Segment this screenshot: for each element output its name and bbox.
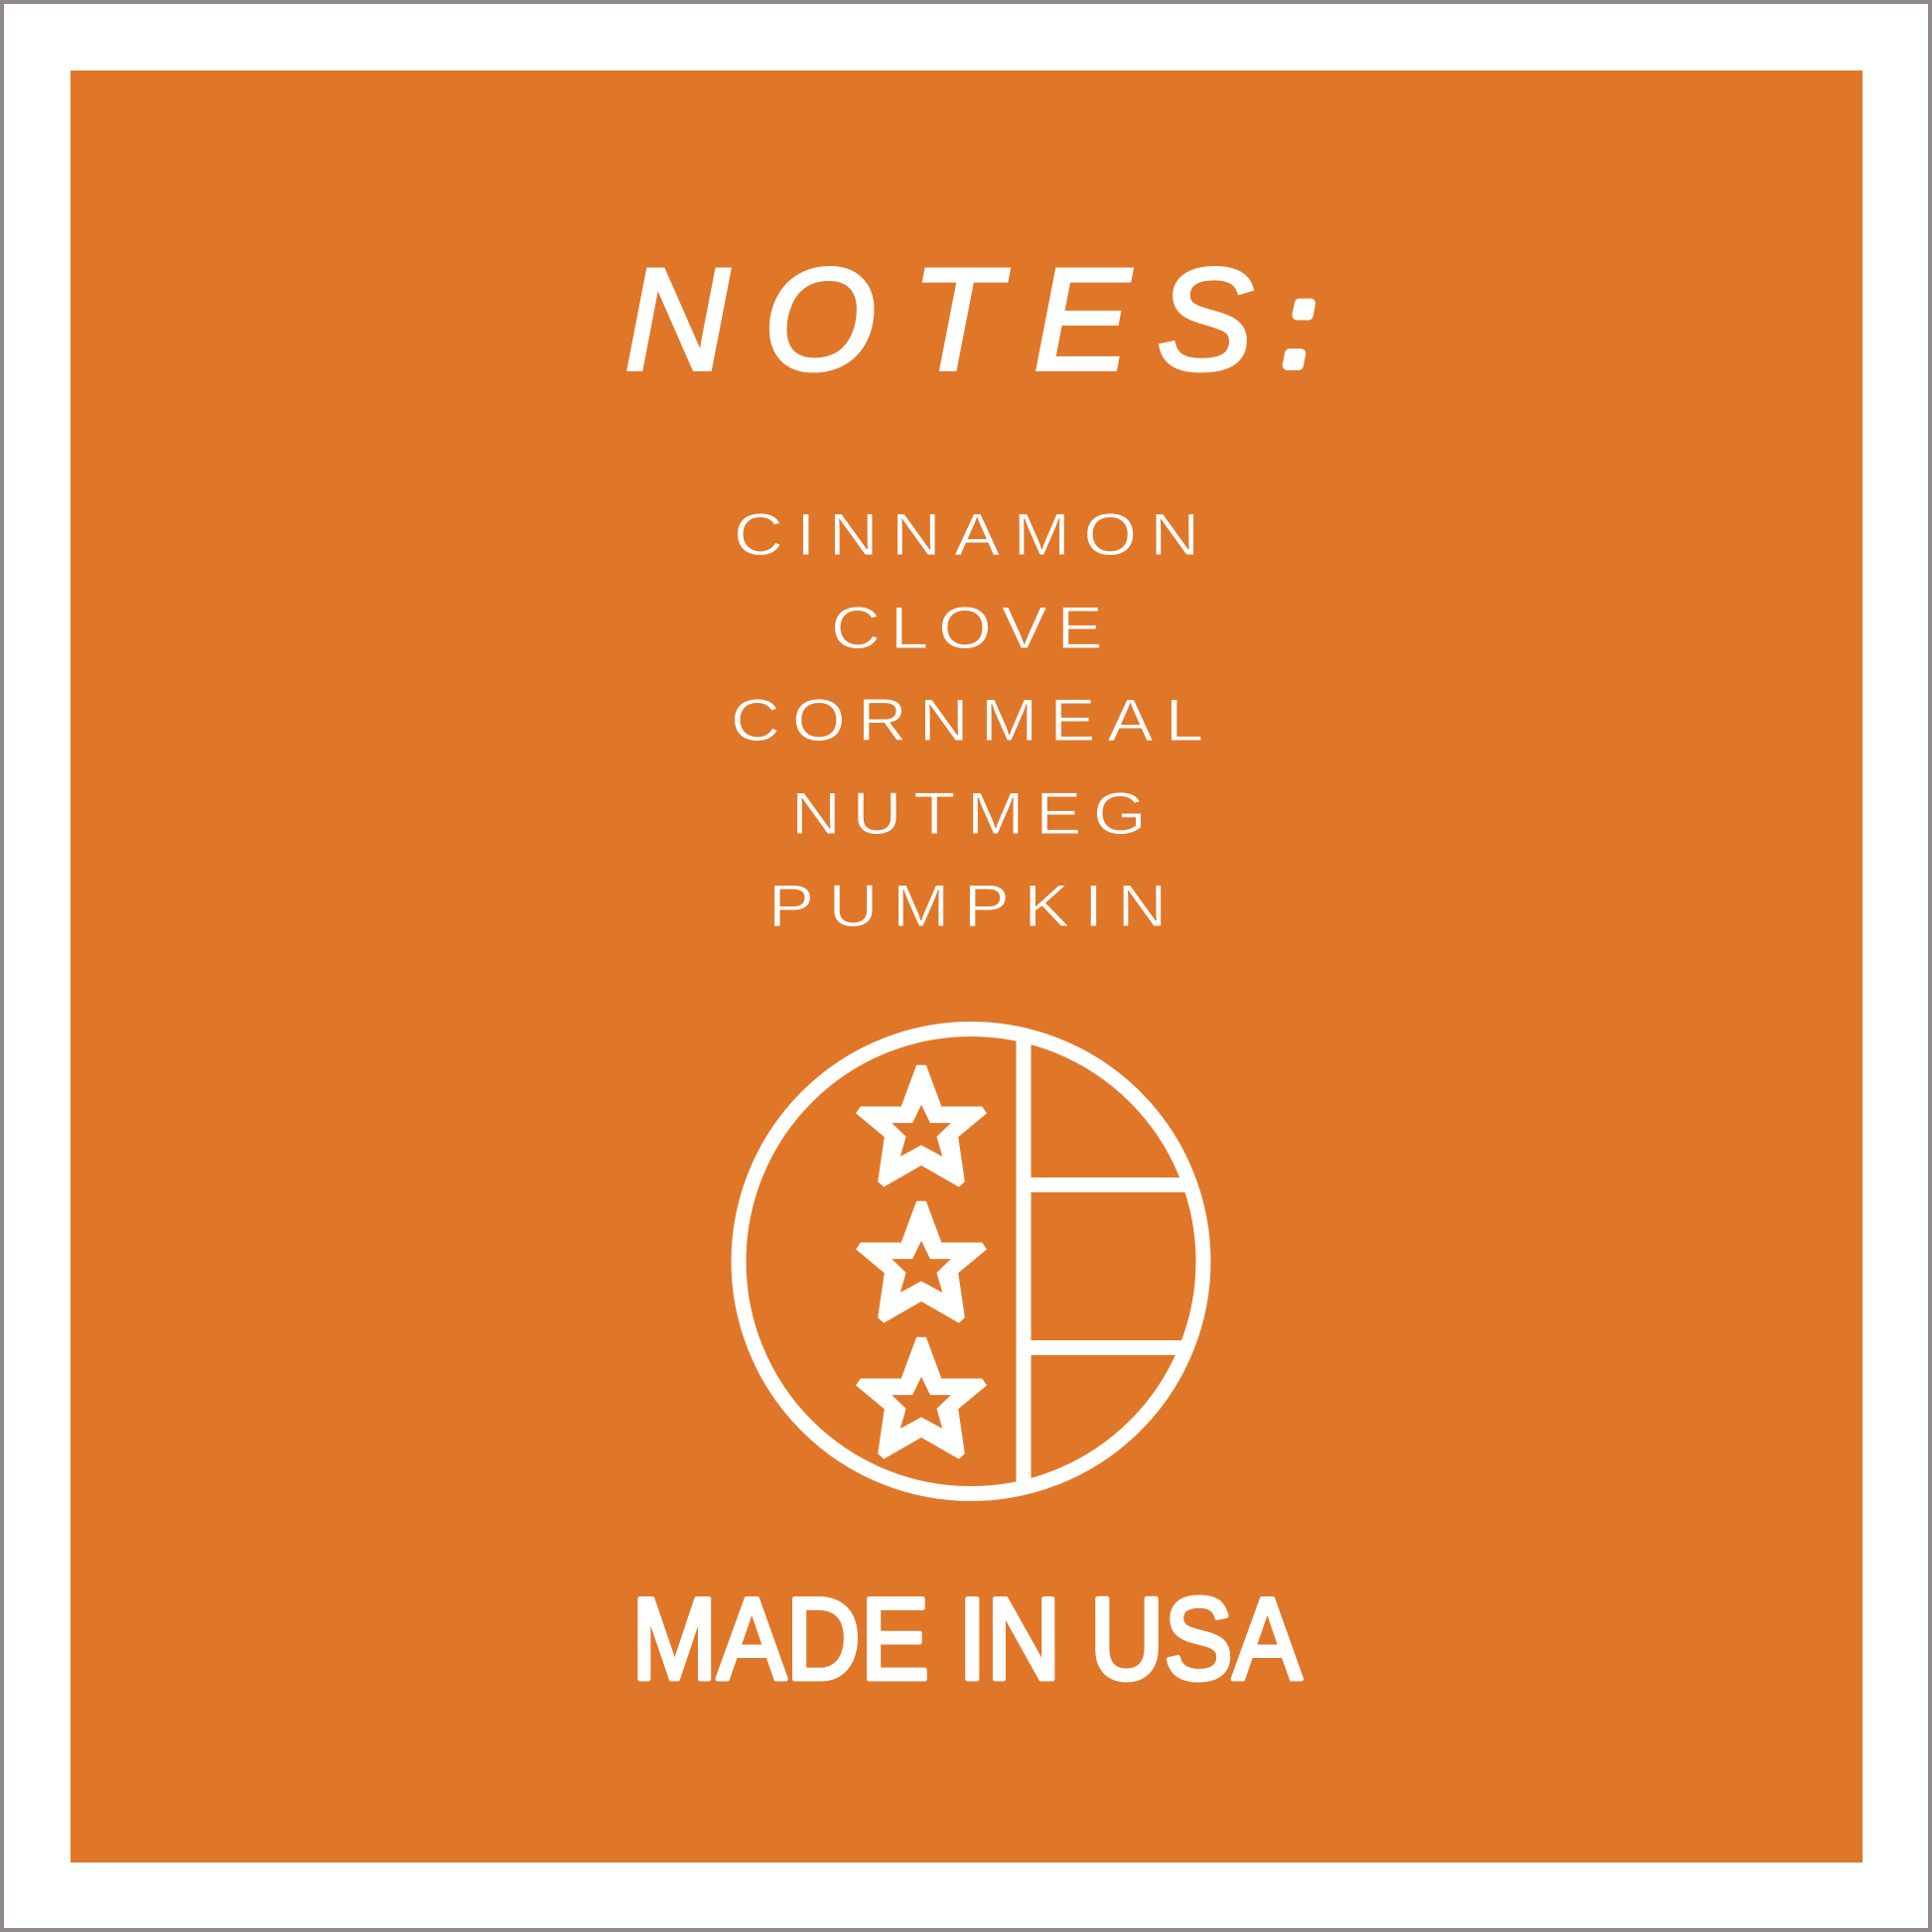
note: cinnamon: CINNAMON — [734, 500, 1199, 568]
note: clove: CLOVE — [831, 594, 1103, 661]
heading: notes: : — [1283, 260, 1315, 391]
note: nutmeg: NUTMEG — [791, 779, 1147, 847]
star 3 — [857, 1337, 986, 1458]
star 2 — [857, 1201, 986, 1322]
heading: notes: NOTES — [624, 238, 1253, 400]
icon: usa flag globe — [739, 1029, 1203, 1493]
stars — [857, 1065, 986, 1458]
text block: list of notes — [731, 500, 1203, 939]
note: cornmeal: CORNMEAL — [731, 686, 1203, 754]
star 1 — [857, 1065, 986, 1186]
flag stripes — [1024, 1035, 1187, 1488]
globe outline — [739, 1029, 1203, 1493]
note: pumpkin: PUMPKIN — [768, 872, 1167, 939]
label: made in usa: MADE IN USA — [631, 1574, 1302, 1704]
